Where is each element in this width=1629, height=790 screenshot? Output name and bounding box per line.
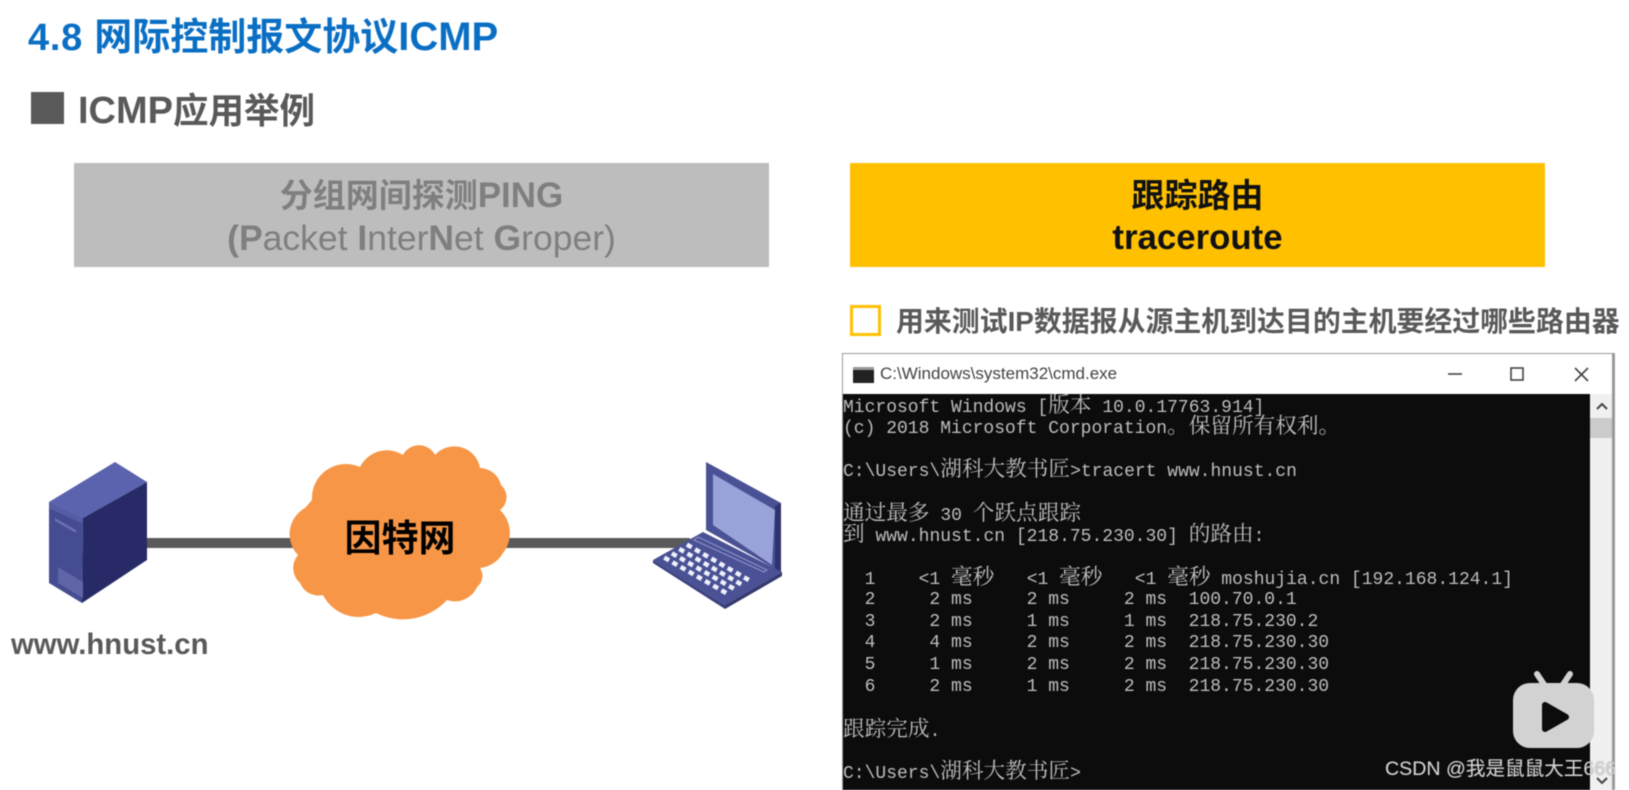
text: 4 4 ms 2 ms 2 ms 218.75.230.30: [865, 633, 1329, 653]
icon: internet cloud: [290, 445, 510, 619]
icon: video site watermark: [1512, 670, 1594, 749]
text: 5 1 ms 2 ms 2 ms 218.75.230.30: [865, 655, 1329, 675]
icon: cmd window icon: [853, 367, 874, 383]
traceroute description: 用来测试IP数据报从源主机到达目的主机要经过哪些路由器: [896, 306, 1620, 337]
text: 2 2 ms 2 ms 2 ms 100.70.0.1: [865, 590, 1297, 610]
text: C:\Users\湖科大教书匠>: [843, 754, 1081, 785]
terminal title text: C:\Windows\system32\cmd.exe: [880, 364, 1117, 383]
panel: traceroute header: traceroute: [1112, 218, 1283, 257]
checkbox bullet: [850, 305, 881, 336]
link lines: [145, 538, 690, 548]
terminal scrollbar: [1590, 394, 1612, 790]
cloud label: 因特网: [344, 518, 456, 559]
window controls: [1447, 366, 1589, 382]
terminal black screen: [843, 394, 1590, 790]
panel: cmd terminal window: [842, 353, 1615, 790]
server hostname label: www.hnust.cn: [11, 628, 208, 661]
network diagram: [48, 444, 783, 620]
panel: PING header (greyed out): [74, 163, 769, 267]
icon: server tower: [49, 462, 147, 603]
watermark text: CSDN @我是鼠鼠大王666: [1385, 758, 1616, 780]
text: Microsoft Windows [版本 10.0.17763.914]: [843, 388, 1264, 419]
text: 1 <1 毫秒 <1 毫秒 <1 毫秒 moshujia.cn [192.168.124.1]: [865, 560, 1513, 591]
text: 3 2 ms 1 ms 1 ms 218.75.230.2: [865, 612, 1318, 632]
text: 跟踪完成.: [843, 712, 940, 743]
text: 到 www.hnust.cn [218.75.230.30] 的路由:: [843, 517, 1264, 548]
panel: traceroute header: 跟踪路由: [1132, 177, 1264, 214]
terminal output: [843, 388, 1513, 785]
heading square bullet: [31, 92, 64, 124]
title: 4.8 网际控制报文协议ICMP: [28, 15, 498, 59]
text: 6 2 ms 1 ms 2 ms 218.75.230.30: [865, 677, 1329, 697]
panel: PING header (greyed out): (Packet InterNet Groper): [227, 218, 616, 258]
text: 通过最多 30 个跃点跟踪: [843, 496, 1081, 527]
panel: PING header (greyed out): 分组网间探测PING: [280, 176, 563, 215]
text: C:\Users\湖科大教书匠>tracert www.hnust.cn: [843, 452, 1297, 483]
section heading: ICMP application examples: [30, 90, 315, 132]
heading text: ICMP应用举例: [78, 90, 315, 132]
icon: laptop: [653, 462, 782, 609]
text: (c) 2018 Microsoft Corporation。保留所有权利。: [843, 409, 1340, 440]
panel: traceroute header: [850, 163, 1545, 267]
scrollbar thumb: [1590, 418, 1612, 438]
scrollbar arrows: [1596, 402, 1608, 785]
